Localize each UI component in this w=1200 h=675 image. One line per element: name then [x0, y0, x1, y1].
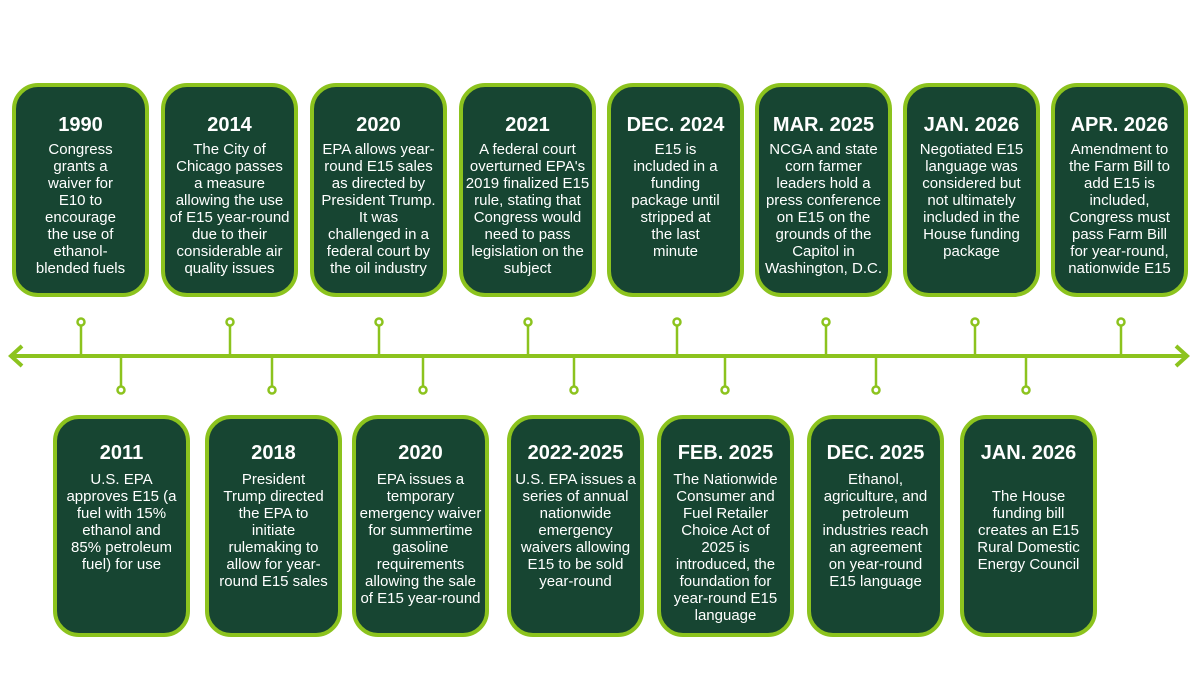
card: 2011: [53, 415, 190, 637]
card: 2022-2025: waivers allowing: [521, 539, 630, 556]
card: 1990: E10 to: [59, 192, 102, 209]
card: Dec 2025: an agreement: [829, 539, 922, 556]
card: Feb 2025: foundation for: [680, 573, 771, 590]
card: 2021: [459, 83, 596, 297]
card: Jan 2026 bottom: The House: [992, 488, 1065, 505]
card: Apr 2026: APR. 2026: [1071, 114, 1168, 136]
card: 2018: Trump directed: [223, 488, 324, 505]
card: 2021: 2019 finalized E15: [466, 175, 589, 192]
card: 2014: quality issues: [184, 260, 275, 277]
card: Mar 2025: Washington, D.C.: [765, 260, 882, 277]
card: Feb 2025: The Nationwide: [673, 471, 778, 488]
card: Dec 2025: agriculture, and: [824, 488, 927, 505]
card: 1990: ethanol-: [53, 243, 108, 260]
card: 2018: allow for year-: [226, 556, 321, 573]
card: Feb 2025: language: [695, 607, 756, 624]
card: Dec 2024: funding: [651, 175, 700, 192]
card: Jan 2026 bottom: JAN. 2026: [981, 442, 1076, 464]
card: 2022-2025: emergency: [538, 522, 613, 539]
card: 2014: The City of: [193, 141, 266, 158]
card: 2020 bottom: emergency waiver: [360, 505, 481, 522]
card: Dec 2024: package until: [631, 192, 720, 209]
card: Feb 2025: Consumer and: [676, 488, 775, 505]
card: Jan 2026 top: Negotiated E15: [920, 141, 1023, 158]
card: 2022-2025: E15 to be sold: [528, 556, 623, 573]
card: Dec 2025: on year-round: [829, 556, 922, 573]
card: Dec 2024: the last: [651, 226, 700, 243]
card: Feb 2025: FEB. 2025: [678, 442, 773, 464]
card: 2021: need to pass: [485, 226, 570, 243]
card: Mar 2025: on E15 on the: [777, 209, 870, 226]
card: Jan 2026 bottom: creates an E15: [978, 522, 1079, 539]
card: Jan 2026 bottom: [960, 415, 1097, 637]
card: 2014: Chicago passes: [176, 158, 283, 175]
card: Feb 2025: Choice Act of: [681, 522, 770, 539]
card: 2014: [161, 83, 298, 297]
card: Jan 2026 top: not ultimately: [927, 192, 1016, 209]
card: 2020 top: round E15 sales: [324, 158, 433, 175]
card: 2022-2025: 2022-2025: [528, 442, 623, 464]
card: Jan 2026 top: [903, 83, 1040, 297]
card: Apr 2026: add E15 is: [1084, 175, 1155, 192]
card: 2020 top: EPA allows year-: [322, 141, 435, 158]
card: 1990: blended fuels: [36, 260, 125, 277]
card: Feb 2025: Fuel Retailer: [683, 505, 768, 522]
card: Mar 2025: leaders hold a: [776, 175, 871, 192]
card: Apr 2026: included,: [1089, 192, 1150, 209]
card: 2021: overturned EPA's: [470, 158, 585, 175]
card: 2021: A federal court: [479, 141, 576, 158]
card: 2021: legislation on the: [471, 243, 584, 260]
card: 2020 top: It was: [359, 209, 398, 226]
card: Feb 2025: introduced, the: [676, 556, 775, 573]
card: 2020 top: as directed by: [332, 175, 425, 192]
card: Jan 2026 bottom: Rural Domestic: [977, 539, 1080, 556]
card: 2014: due to their: [192, 226, 267, 243]
card: 2018: the EPA to: [239, 505, 308, 522]
card: Feb 2025: year-round E15: [674, 590, 777, 607]
card: Mar 2025: grounds of the: [776, 226, 871, 243]
card: 2020 top: federal court by: [327, 243, 430, 260]
card: Jan 2026 top: House funding: [923, 226, 1020, 243]
card: 2022-2025: [507, 415, 644, 637]
card: 2014: 2014: [207, 114, 252, 136]
card: Dec 2025: industries reach: [823, 522, 928, 539]
card: 1990: encourage: [45, 209, 116, 226]
card: Feb 2025: [657, 415, 794, 637]
card: Dec 2025: DEC. 2025: [827, 442, 924, 464]
card: 2020 bottom: temporary: [387, 488, 454, 505]
card: 2022-2025: nationwide: [540, 505, 611, 522]
card: 2020 top: President Trump.: [321, 192, 436, 209]
card: 2018: [205, 415, 342, 637]
card: 2014: a measure: [194, 175, 265, 192]
card: Jan 2026 top: included in the: [923, 209, 1020, 226]
card: 2020 top: [310, 83, 447, 297]
card: Feb 2025: 2025 is: [701, 539, 750, 556]
card: 2021: Congress would: [474, 209, 581, 226]
card: Jan 2026 top: considered but: [922, 175, 1021, 192]
card: Jan 2026 top: package: [943, 243, 1000, 260]
card: 2018: rulemaking to: [228, 539, 319, 556]
card: 2014: allowing the use: [176, 192, 283, 209]
card: 2018: round E15 sales: [219, 573, 328, 590]
card: Dec 2024: stripped at: [640, 209, 711, 226]
card: 2020 bottom: EPA issues a: [377, 471, 464, 488]
card: 2020 top: the oil industry: [330, 260, 427, 277]
card: 2014: considerable air: [177, 243, 282, 260]
card: Mar 2025: MAR. 2025: [773, 114, 874, 136]
card: 2020 top: challenged in a: [328, 226, 429, 243]
card: Dec 2024: [607, 83, 744, 297]
card: 2011: fuel with 15%: [77, 505, 166, 522]
card: 2020 bottom: [352, 415, 489, 637]
card: 2020 bottom: of E15 year-round: [360, 590, 481, 607]
card: 2020 bottom: for summertime: [368, 522, 473, 539]
card: Dec 2025: E15 language: [829, 573, 922, 590]
card: Jan 2026 top: JAN. 2026: [924, 114, 1019, 136]
card: Apr 2026: [1051, 83, 1188, 297]
card: 2018: initiate: [252, 522, 295, 539]
card: Dec 2025: Ethanol,: [848, 471, 903, 488]
card: Apr 2026: Congress must: [1069, 209, 1170, 226]
card: 2018: 2018: [251, 442, 296, 464]
card: 1990: 1990: [58, 114, 103, 136]
card: 2011: approves E15 (a: [66, 488, 177, 505]
card: 2020 bottom: 2020: [398, 442, 443, 464]
card: 2022-2025: series of annual: [523, 488, 628, 505]
card: Apr 2026: for year-round,: [1070, 243, 1169, 260]
card: Apr 2026: the Farm Bill to: [1069, 158, 1170, 175]
card: 2021: 2021: [505, 114, 550, 136]
card: 2020 bottom: allowing the sale: [365, 573, 476, 590]
card: 2021: rule, stating that: [474, 192, 581, 209]
card: Dec 2025: petroleum: [842, 505, 909, 522]
card: Jan 2026 bottom: funding bill: [993, 505, 1064, 522]
card: 2020 bottom: requirements: [377, 556, 464, 573]
card: 2022-2025: U.S. EPA issues a: [515, 471, 636, 488]
card: 1990: the use of: [48, 226, 113, 243]
card: Jan 2026 bottom: Energy Council: [978, 556, 1079, 573]
card: 2011: ethanol and: [82, 522, 161, 539]
card: 2022-2025: year-round: [539, 573, 612, 590]
card: 2011: 85% petroleum: [71, 539, 172, 556]
card: Mar 2025: corn farmer: [785, 158, 862, 175]
card: 2021: subject: [504, 260, 551, 277]
card: Dec 2025: [807, 415, 944, 637]
card: 2020 top: 2020: [356, 114, 401, 136]
card: Apr 2026: nationwide E15: [1068, 260, 1171, 277]
card: Mar 2025: [755, 83, 892, 297]
card: Mar 2025: Capitol in: [792, 243, 855, 260]
card: Dec 2024: minute: [653, 243, 698, 260]
card: Apr 2026: Amendment to: [1071, 141, 1168, 158]
card: 2020 bottom: gasoline: [393, 539, 448, 556]
card: 2018: President: [242, 471, 305, 488]
card: Jan 2026 top: language was: [925, 158, 1018, 175]
card: Apr 2026: pass Farm Bill: [1072, 226, 1167, 243]
card: 1990: Congress: [48, 141, 113, 158]
card: Dec 2024: included in a: [633, 158, 718, 175]
card: 2011: fuel) for use: [82, 556, 161, 573]
card: 1990: waiver for: [48, 175, 113, 192]
card: 1990: [12, 83, 149, 297]
card: 1990: grants a: [53, 158, 108, 175]
card: Dec 2024: DEC. 2024: [627, 114, 724, 136]
card: Mar 2025: press conference: [766, 192, 881, 209]
card: Dec 2024: E15 is: [655, 141, 696, 158]
card: 2011: U.S. EPA: [90, 471, 153, 488]
card: 2014: of E15 year-round: [169, 209, 290, 226]
card: Mar 2025: NCGA and state: [769, 141, 878, 158]
card: 2011: 2011: [100, 442, 143, 464]
